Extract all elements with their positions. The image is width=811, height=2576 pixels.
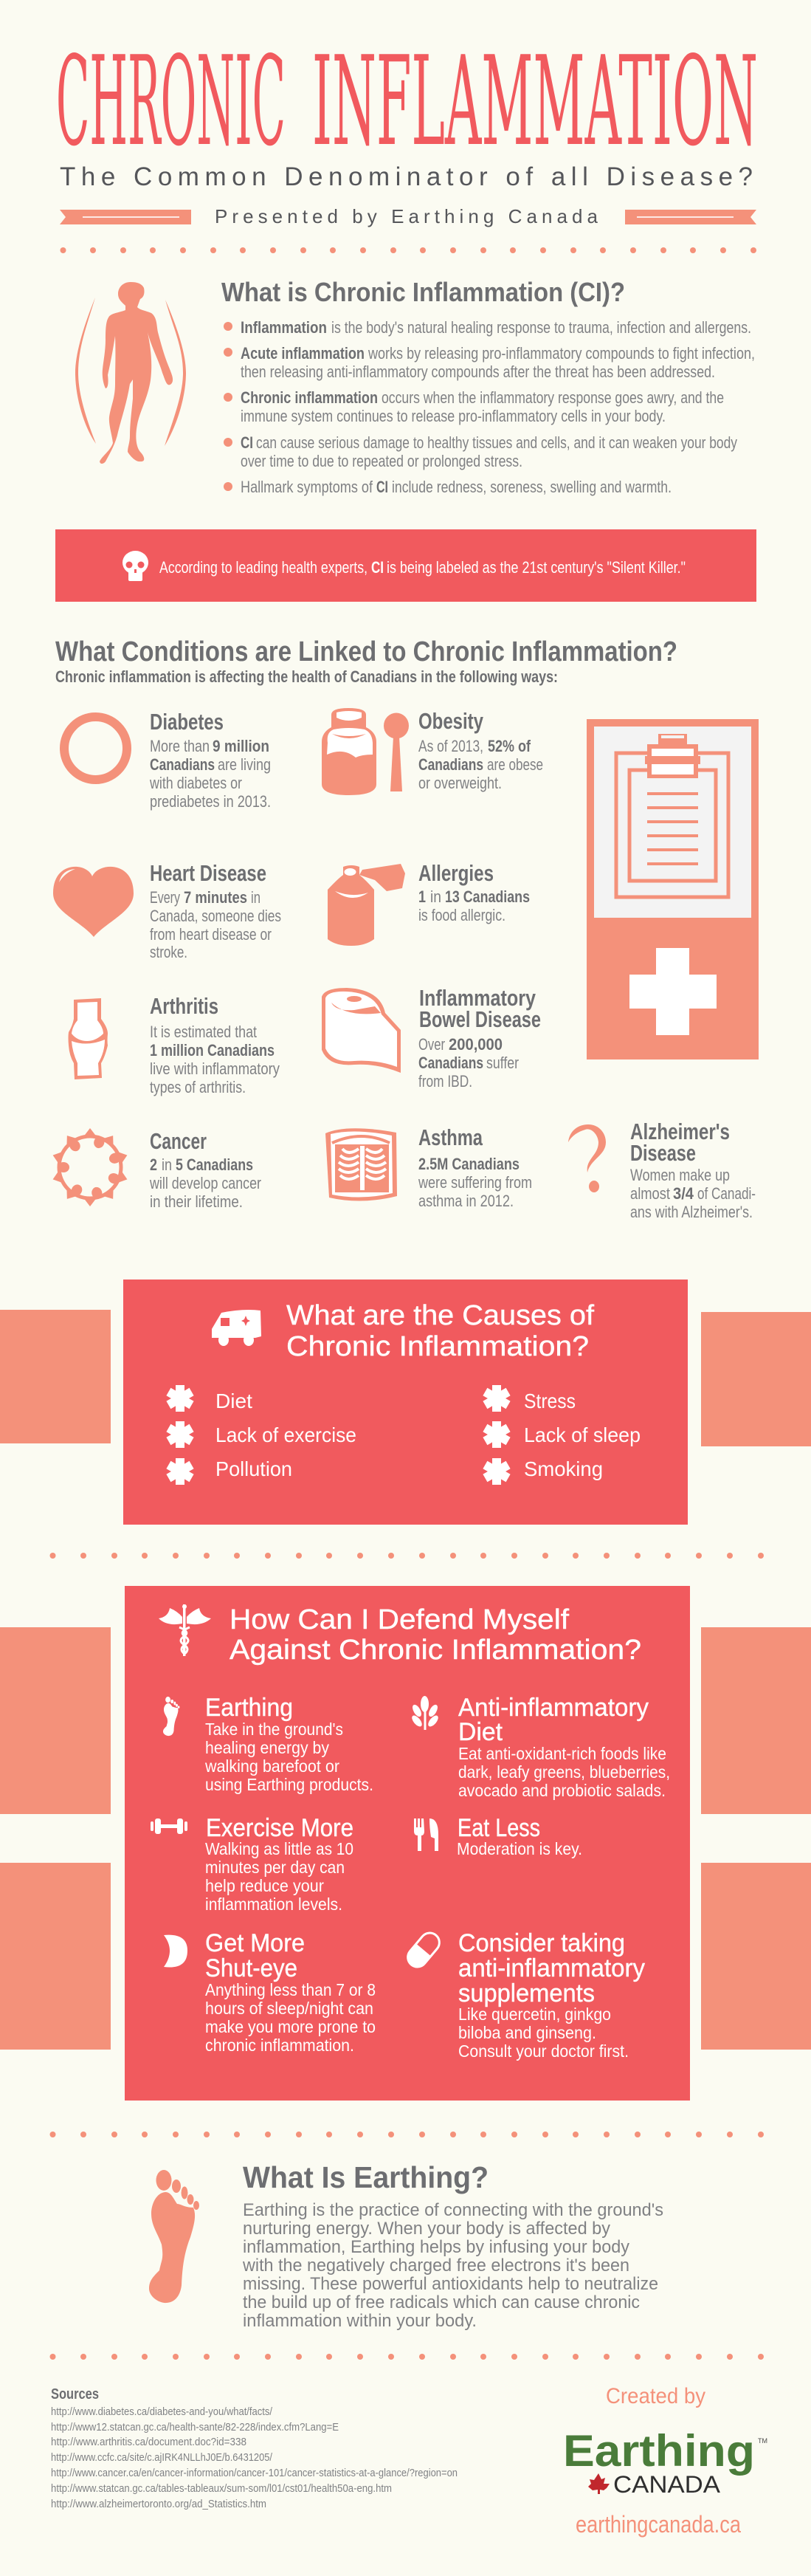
icon: wheat leaves (410, 1696, 440, 1730)
tip: earthing: healing energy by (205, 1738, 329, 1757)
tip: anti-inflammatory diet: avocado and probiotic salads. (458, 1781, 666, 1800)
sources list: http://www.arthritis.ca/document.doc?id=338 (51, 2436, 246, 2448)
bullet 3 (224, 388, 724, 425)
sources list: http://www.diabetes.ca/diabetes-and-you/what/facts/ (51, 2405, 273, 2418)
tip: anti-inflammatory diet: Anti-inflammatory (458, 1694, 649, 1722)
dotted divider (50, 2132, 764, 2137)
condition: diabetes: 9 million (213, 737, 269, 755)
tip: earthing: walking barefoot or (204, 1756, 339, 1776)
condition: diabetes: Canadians (150, 755, 215, 774)
list: causes: Lack of exercise (215, 1423, 356, 1446)
icon: knee joint (68, 998, 108, 1079)
panel: causes (123, 1280, 688, 1525)
bullet 5: CI (376, 478, 388, 496)
tip: eat less: Moderation is key. (457, 1839, 582, 1858)
condition: arthritis: types of arthritis. (150, 1078, 246, 1096)
tip: earthing: using Earthing products. (205, 1775, 373, 1794)
icon: asterisks (166, 1385, 511, 1485)
tip: consider supplements: Like quercetin, ginkgo (458, 2005, 611, 2024)
condition: allergies: in (430, 887, 441, 906)
sources list: http://www12.statcan.gc.ca/health-sante/82-228/index.cfm?Lang=E (51, 2421, 339, 2434)
condition: inflammatory bowel disease: Over (418, 1035, 445, 1054)
tip: exercise more: inflammation levels. (205, 1895, 342, 1914)
condition: cancer (51, 1128, 261, 1211)
list: causes: Pollution (215, 1457, 292, 1480)
sources list: Sources (51, 2386, 99, 2402)
side block: causes right (701, 1312, 811, 1446)
condition: arthritis: 1 million Canadians (150, 1041, 275, 1059)
heading: defend: Against Chronic Inflammation? (230, 1635, 641, 1666)
sources list (51, 2386, 458, 2510)
condition: asthma: were suffering from (418, 1173, 532, 1192)
heading: conditions linked: What Conditions are Linked to Chronic Inflammation? (55, 636, 677, 667)
bullet 4 (224, 433, 737, 470)
condition: obesity (322, 708, 543, 795)
tip: get more shut-eye: chronic inflammation. (205, 2036, 354, 2055)
icon: medical cross (629, 948, 717, 1035)
condition: heart disease: 7 minutes (184, 888, 247, 907)
condition: diabetes: prediabetes in 2013. (150, 792, 271, 811)
condition: alzheimer's disease: Women make up (630, 1166, 730, 1184)
text block: earthing description: inflammation within your body. (243, 2311, 477, 2331)
dotted divider (50, 1553, 764, 1559)
condition: cancer: Cancer (150, 1128, 207, 1154)
sources list: http://www.statcan.gc.ca/tables-tableaux/sum-som/l01/cst01/health50a-eng.htm (51, 2482, 392, 2495)
tip: exercise more: minutes per day can (205, 1858, 345, 1877)
condition: asthma: asthma in 2012. (418, 1192, 514, 1210)
bullet list: inflammation facts (224, 318, 755, 496)
condition: heart disease: stroke. (150, 943, 187, 961)
tip: exercise more (151, 1814, 353, 1914)
icon: maple leaf (588, 2473, 610, 2494)
dotted divider (50, 2354, 764, 2360)
condition: heart disease (53, 860, 281, 961)
condition: alzheimer's disease: 3/4 (673, 1184, 694, 1203)
icon: dumbbell (151, 1818, 187, 1834)
condition: alzheimer's disease (568, 1119, 756, 1221)
icon: heart (53, 867, 134, 937)
icon: human body with inflammation arcs (75, 282, 186, 464)
tip: exercise more: Walking as little as 10 (205, 1839, 353, 1858)
panel: defend (125, 1586, 690, 2101)
condition: allergies: is food allergic. (418, 906, 505, 924)
tip: eat less: Eat Less (458, 1814, 540, 1842)
logo: earthing canada: CANADA (613, 2471, 721, 2498)
condition: alzheimer's disease: Alzheimer's (630, 1119, 730, 1144)
icon: fork and knife (414, 1818, 438, 1851)
condition: diabetes: Diabetes (150, 709, 224, 735)
bullet 3: immune system continues to release pro-inflammatory cells in your body. (241, 407, 666, 425)
callout: silent killer: is being labeled as the 21st century's "Silent Killer." (387, 558, 686, 577)
list: causes: Smoking (524, 1457, 603, 1480)
tip: eat less (414, 1814, 582, 1858)
tip: earthing: Earthing (205, 1694, 293, 1722)
list: causes: Lack of sleep (524, 1423, 641, 1446)
website: earthingcanada.ca (576, 2511, 741, 2538)
text block: earthing description: inflammation, Earthing helps by infusing your body (243, 2237, 629, 2257)
condition: heart disease: in (251, 888, 260, 907)
condition: obesity: As of 2013, (418, 737, 483, 755)
presented by banner: Presented by Earthing Canada (215, 205, 598, 227)
side blocks: defend left (0, 1627, 111, 2050)
created by: Created by (606, 2384, 705, 2408)
tip: consider supplements: Consider taking (458, 1929, 625, 1957)
tip: get more shut-eye: Shut-eye (205, 1954, 297, 1982)
condition: obesity: 52% of (488, 737, 531, 755)
panel: clipboard and medical cross (587, 719, 759, 1059)
sources list: http://www.alzheimertoronto.org/ad_Statistics.htm (51, 2498, 266, 2510)
icon: capsule (403, 1928, 444, 1972)
bullet 1: Inflammation (241, 318, 327, 337)
bullet 3: Chronic inflammation (241, 388, 378, 407)
condition: cancer: will develop cancer (149, 1174, 261, 1192)
icon: ambulance (212, 1310, 261, 1346)
tip: earthing (163, 1694, 373, 1794)
condition: cancer: 2 (150, 1155, 157, 1174)
bullet 4: over time to due to repeated or prolonged stress. (241, 452, 522, 470)
condition: inflammatory bowel disease: from IBD. (418, 1072, 472, 1090)
condition: inflammatory bowel disease (322, 985, 541, 1090)
condition: diabetes (64, 709, 271, 811)
condition: heart disease: Canada, someone dies (150, 907, 281, 925)
tip: anti-inflammatory diet (410, 1694, 670, 1800)
condition: alzheimer's disease: almost (630, 1184, 670, 1203)
title: CHRONIC (56, 30, 286, 174)
condition: cancer: in (162, 1155, 172, 1174)
icon: bottle and spoon (322, 708, 409, 795)
condition: diabetes: with diabetes or (149, 774, 242, 792)
icon: large footprint (149, 2170, 199, 2303)
heading: causes: What are the Causes of (286, 1300, 594, 1331)
bullet 5: Hallmark symptoms of (241, 478, 373, 496)
condition: obesity: Obesity (418, 708, 484, 734)
tip: get more shut-eye: hours of sleep/night can (205, 1999, 373, 2018)
text block: earthing description: with the negatively charged free electrons it's been (242, 2256, 629, 2276)
list: causes: Stress (524, 1390, 576, 1412)
condition: obesity: or overweight. (418, 774, 502, 792)
tip: get more shut-eye: make you more prone to (205, 2017, 376, 2036)
condition: arthritis (68, 993, 280, 1096)
heading: defend: How Can I Defend Myself (230, 1604, 569, 1635)
condition: cancer: in their lifetime. (150, 1192, 243, 1211)
bullet 2 (224, 344, 755, 381)
condition: obesity: are obese (487, 755, 543, 774)
condition: heart disease: from heart disease or (150, 925, 272, 944)
bullet 5 (224, 478, 672, 496)
text block: earthing description: the build up of free radicals which can cause chronic (243, 2292, 640, 2312)
tip: consider supplements: anti-inflammatory (458, 1954, 645, 1982)
subtitle: The Common Denominator of all Disease? (60, 162, 753, 191)
condition: allergies: 1 (418, 887, 426, 906)
logo: earthing canada (563, 2426, 767, 2498)
heading: causes (286, 1300, 594, 1362)
list: causes (215, 1390, 641, 1480)
condition: obesity: Canadians (418, 755, 483, 774)
condition: allergies: 13 Canadians (445, 887, 530, 906)
callout: silent killer: According to leading health experts, (159, 558, 367, 577)
condition: heart disease: Every (150, 888, 180, 907)
callout: silent killer (55, 529, 756, 602)
side block: causes left (0, 1310, 111, 1443)
condition: inflammatory bowel disease: Inflammatory (419, 985, 536, 1011)
condition: allergies: Allergies (418, 860, 494, 886)
icon: spray can (328, 864, 405, 946)
icon: question mark (568, 1124, 606, 1192)
condition: arthritis: It is estimated that (150, 1023, 257, 1041)
presented by banner (60, 205, 756, 227)
condition: cancer: 5 Canadians (176, 1155, 253, 1174)
text block: earthing description: Earthing is the practice of connecting with the ground's (243, 2200, 663, 2220)
heading: what is earthing: What Is Earthing? (243, 2160, 489, 2194)
condition: inflammatory bowel disease: Canadians (418, 1054, 483, 1072)
side blocks: defend right (701, 1627, 811, 2050)
tip: exercise more: help reduce your (205, 1876, 324, 1895)
icon: spiked cell (51, 1128, 129, 1206)
icon: paper roll (322, 988, 401, 1073)
bullet 2: then releasing anti-inflammatory compounds after the threat has been addressed. (241, 363, 715, 381)
condition: inflammatory bowel disease: 200,000 (449, 1035, 503, 1054)
tip: get more shut-eye (164, 1929, 376, 2055)
subheading: conditions: Chronic inflammation is affecting the health of Canadians in the following ways: (55, 667, 558, 686)
heading: causes: Chronic Inflammation? (286, 1331, 589, 1362)
heading: what is chronic inflammation: What is Chronic Inflammation (CI)? (221, 277, 625, 307)
icon: skull (122, 551, 148, 581)
tip: consider supplements: Consult your doctor first. (458, 2041, 629, 2061)
callout: silent killer: CI (371, 558, 384, 577)
bullet 4: CI (241, 433, 253, 452)
icon: caduceus (159, 1604, 211, 1656)
tip: get more shut-eye: Anything less than 7 or 8 (205, 1980, 376, 1999)
condition: alzheimer's disease: ans with Alzheimer's. (630, 1203, 753, 1221)
logo: earthing canada: TM (758, 2437, 767, 2445)
condition: alzheimer's disease: Disease (630, 1140, 696, 1166)
condition: arthritis: Arthritis (150, 993, 218, 1019)
list: causes: Diet (215, 1390, 252, 1412)
tip: get more shut-eye: Get More (205, 1929, 305, 1957)
condition: asthma (325, 1124, 532, 1210)
bullet 3: occurs when the inflammatory response goes awry, and the (382, 388, 724, 407)
sources list: http://www.ccfc.ca/site/c.ajIRK4NLLhJ0E/b.6431205/ (51, 2451, 273, 2464)
tip: consider supplements: biloba and ginseng. (458, 2023, 596, 2042)
tip: exercise more: Exercise More (206, 1814, 353, 1842)
logo: earthing canada: Earthing (563, 2426, 755, 2476)
bullet 5: include redness, soreness, swelling and warmth. (392, 478, 672, 496)
sources list: http://www.cancer.ca/en/cancer-information/cancer-101/cancer-statistics-at-a-glance/?region=on (51, 2467, 458, 2479)
icon: clipboard (616, 734, 728, 897)
tip: anti-inflammatory diet: Eat anti-oxidant-rich foods like (458, 1744, 666, 1763)
condition: asthma: 2.5M Canadians (418, 1155, 520, 1173)
tip: consider supplements: supplements (458, 1979, 595, 2007)
icon: ring (64, 717, 127, 780)
icon: foot (163, 1697, 179, 1736)
text block: earthing description: nurturing energy. When your body is affected by (243, 2219, 610, 2239)
icon: chest x-ray (325, 1128, 397, 1201)
bullet 2: Acute inflammation (241, 344, 365, 363)
text block: earthing description (242, 2200, 663, 2331)
tip: consider supplements (403, 1928, 645, 2061)
heading: defend (230, 1604, 641, 1666)
condition: arthritis: live with inflammatory (150, 1059, 280, 1078)
condition: heart disease: Heart Disease (150, 860, 266, 886)
condition: asthma: Asthma (418, 1124, 483, 1150)
dotted divider (61, 247, 756, 253)
condition: allergies (328, 860, 530, 946)
condition: alzheimer's disease: of Canadi- (697, 1184, 756, 1203)
condition: inflammatory bowel disease: suffer (486, 1054, 519, 1072)
tip: anti-inflammatory diet: dark, leafy greens, blueberries, (458, 1762, 670, 1782)
tip: earthing: Take in the ground's (205, 1720, 343, 1739)
condition: diabetes: More than (150, 737, 210, 755)
condition: inflammatory bowel disease: Bowel Disease (419, 1006, 541, 1032)
text block: earthing description: missing. These powerful antioxidants help to neutralize (243, 2274, 658, 2294)
icon: moon (164, 1935, 187, 1968)
tip: anti-inflammatory diet: Diet (458, 1718, 503, 1746)
condition: diabetes: are living (218, 755, 271, 774)
